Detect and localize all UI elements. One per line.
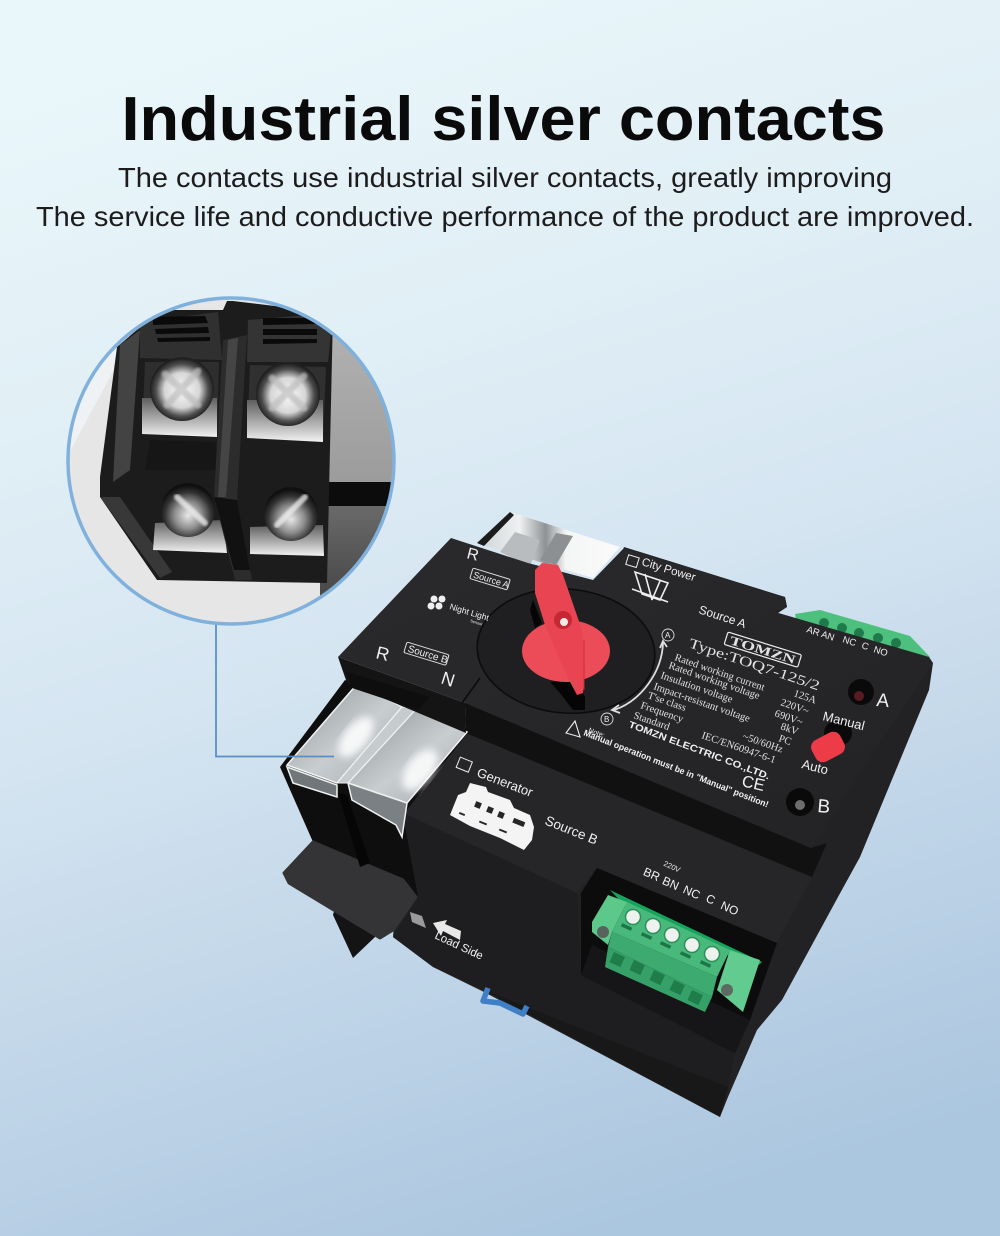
- side block black: [280, 680, 470, 897]
- lamp A: [848, 679, 874, 705]
- nameplate text: TOMZN ELECTRIC CO.,LTD.: [627, 720, 771, 782]
- metal plates: [144, 362, 219, 428]
- device labels: upper plate: Source A: [697, 603, 748, 631]
- lower body front: [393, 813, 735, 1087]
- device labels: upper plate: [374, 545, 890, 818]
- nameplate text: IEC/EN60947-6-1: [700, 730, 777, 766]
- nameplate text: A: [665, 631, 671, 640]
- device labels: lower block: BN: [660, 874, 681, 893]
- screw 1: [150, 357, 214, 421]
- dial slit: [530, 600, 585, 710]
- black fin: [333, 890, 380, 958]
- rear terminal block: [610, 547, 787, 640]
- centre divider: [214, 335, 252, 580]
- nameplate text: Note:: [587, 727, 605, 740]
- device labels: lower block: [410, 757, 741, 963]
- device: automatic transfer switch: [280, 512, 933, 1117]
- nameplate text: PC: [777, 733, 793, 748]
- manual/auto slider: [808, 720, 852, 765]
- nameplate text: Type:TOQ7-125/2: [687, 637, 821, 694]
- nameplate text: T'se class: [646, 690, 688, 714]
- device labels: upper plate: CE: [740, 772, 766, 795]
- screw 3: [161, 483, 215, 537]
- terminal recess: [581, 868, 777, 1053]
- device labels: upper plate: R: [465, 545, 480, 565]
- screw 4: [264, 487, 318, 541]
- top plate side thickness: [338, 657, 466, 733]
- callout line: [216, 625, 334, 756]
- magnifier: silver contacts close-up: [60, 290, 405, 635]
- top plate: [338, 538, 933, 848]
- screw 2: [256, 362, 320, 426]
- device labels: lower block: C: [704, 891, 718, 908]
- lower body top face: [403, 733, 812, 943]
- device labels: upper plate: AR AN: [805, 624, 836, 644]
- device labels: upper plate: Sensor: [470, 618, 484, 627]
- nameplate text: Impact-resistant voltage: [652, 681, 752, 725]
- red knob: [522, 563, 610, 695]
- device labels: upper plate: B: [817, 796, 831, 818]
- divider post: [338, 793, 370, 867]
- device labels: upper plate: A: [876, 690, 890, 712]
- device labels: upper plate: C: [860, 640, 870, 653]
- subtitle: [36, 162, 974, 232]
- nameplate text: ~50/60Hz: [741, 731, 784, 756]
- clear cover right: [348, 708, 467, 837]
- device labels: upper plate: Auto: [800, 756, 830, 777]
- nameplate text: [566, 629, 821, 809]
- black flap: [284, 842, 416, 938]
- nameplate text: B: [604, 715, 609, 724]
- nameplate text: 220V~: [779, 697, 810, 717]
- outer body silhouette: [393, 663, 933, 1117]
- nameplate text: 8kV: [779, 721, 800, 738]
- rear clear cover: [477, 512, 620, 578]
- device labels: lower block: 220V: [662, 859, 682, 874]
- device labels: upper plate: NC: [841, 634, 858, 649]
- device labels: lower block: BR: [641, 865, 662, 884]
- upper green connector: [795, 610, 930, 680]
- device labels: upper plate: N: [439, 668, 457, 691]
- device labels: upper plate: Night Light: [448, 601, 491, 623]
- socket notch: [347, 672, 430, 710]
- arc arrow: [612, 641, 667, 713]
- generator icon: [450, 783, 534, 850]
- device labels: lower block: NC: [681, 882, 703, 902]
- tower icon: [632, 572, 668, 602]
- recess lower lip: [581, 945, 750, 1053]
- device labels: upper plate: R: [374, 642, 391, 665]
- lamp B: [786, 788, 814, 816]
- device labels: upper plate: City Power: [640, 556, 697, 584]
- clear cover left: [287, 683, 402, 797]
- device labels: lower block: Generator: [475, 765, 536, 800]
- nameplate text: TOMZN: [728, 633, 797, 667]
- clear cover bridge: [337, 707, 417, 783]
- subtitle: The service life and conductive performance of the product are improved.: [36, 201, 974, 232]
- device labels: lower block: Load Side: [433, 930, 485, 963]
- subtitle: The contacts use industrial silver contacts, greatly improving: [118, 162, 892, 193]
- blue DIN clip: [483, 988, 527, 1014]
- lower green connector: [592, 890, 762, 1012]
- title: Industrial silver contacts: [122, 85, 886, 154]
- terminal block body: [100, 301, 333, 583]
- vents: [153, 316, 317, 344]
- device labels: lower block: NO: [719, 898, 741, 918]
- device labels: upper plate: Source B: [406, 644, 449, 666]
- device labels: upper plate: Source A: [472, 570, 510, 590]
- nameplate text: Manual operation must be in "Manual" position!: [582, 728, 770, 809]
- nameplate text: Rated working voltage: [667, 660, 761, 702]
- dial: [472, 581, 660, 721]
- device labels: lower block: Source B: [543, 813, 600, 848]
- nameplate text: 690V~: [773, 708, 804, 728]
- plate front band: [465, 703, 827, 877]
- plate seam: [462, 678, 480, 703]
- device labels: upper plate: Manual: [821, 708, 866, 733]
- lower body base band: [484, 990, 728, 1117]
- nameplate text: Insulation voltage: [659, 670, 734, 706]
- nameplate text: 125A: [792, 688, 818, 707]
- device labels: upper plate: NO: [872, 644, 889, 659]
- nameplate text: Standard: [632, 710, 672, 733]
- nameplate text: Rated working current: [673, 652, 766, 694]
- nameplate text: Frequency: [639, 700, 685, 726]
